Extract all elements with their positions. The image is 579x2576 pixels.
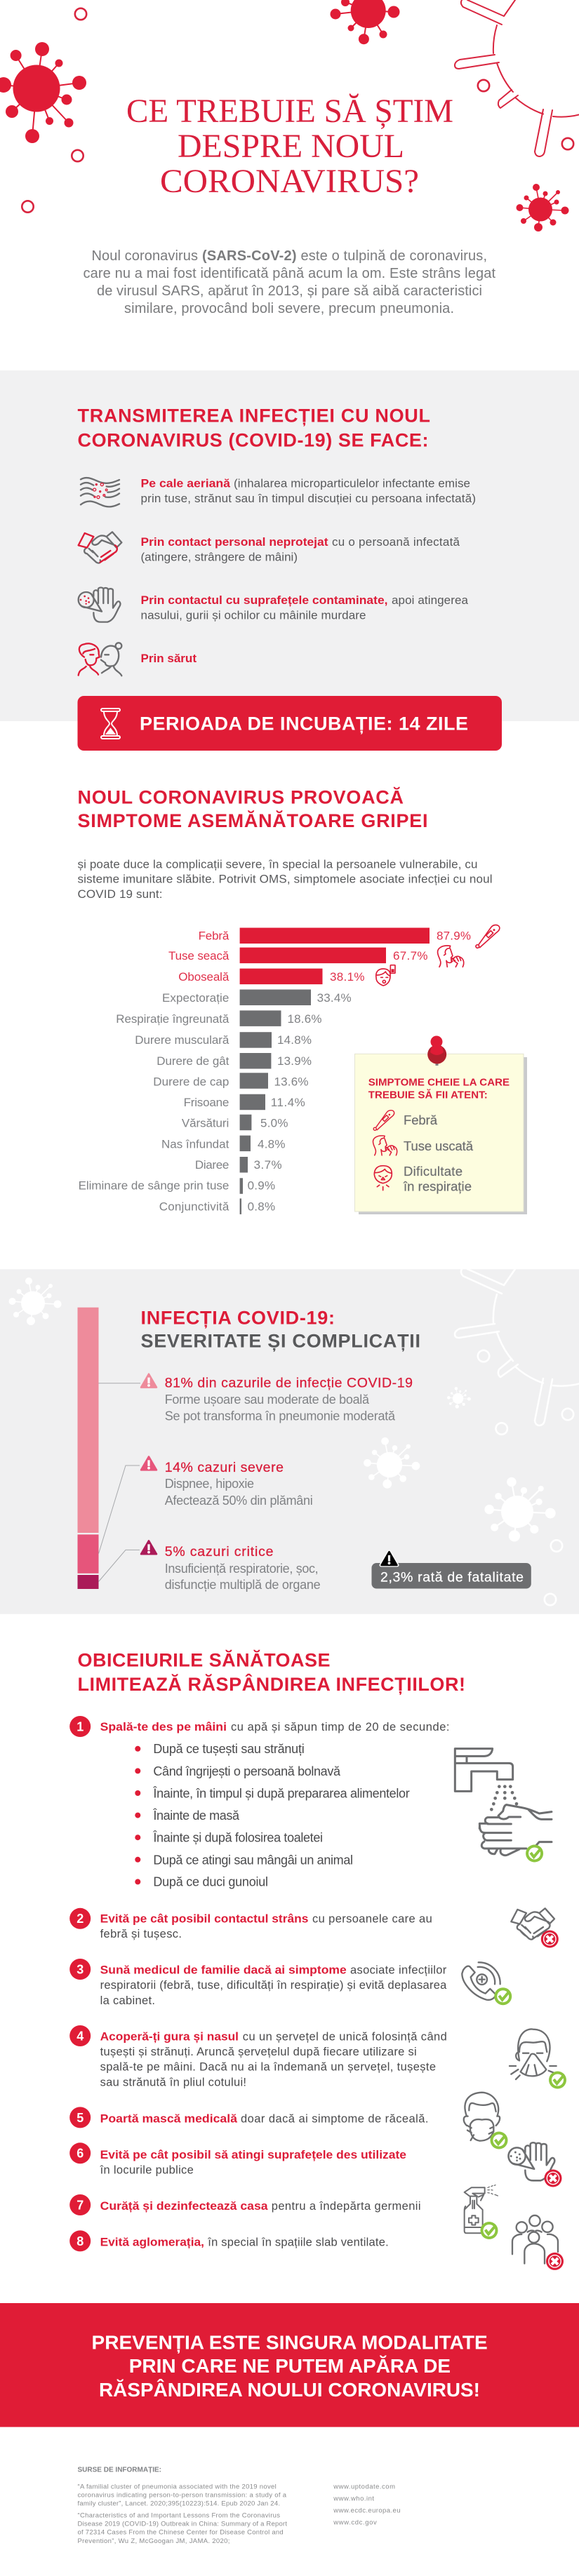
sources: websites: www.cdc.gov — [333, 2519, 377, 2527]
text: airborne — [140, 477, 476, 505]
stacked severity bar — [77, 1308, 98, 1589]
habit 3: call doctor: asociate infecțiilor — [350, 1964, 447, 1977]
icon: kiss — [79, 643, 121, 676]
habit 7: disinfect — [69, 2194, 420, 2215]
item: 14% — [141, 1456, 313, 1508]
icon: hand with germ — [508, 2142, 554, 2180]
bar: Oboseală: 38.1% — [330, 970, 365, 984]
bar: Febră: 87.9% — [437, 929, 471, 943]
habit 4: cover mouth: tușești și strănuți. Aruncă șervețelul după fiecare utilizare si — [100, 2046, 417, 2058]
habit 3: call doctor: 3 — [76, 1963, 84, 1977]
virus decoration: large solid left — [0, 42, 86, 143]
text: symptoms intro: COVID 19 sunt: — [77, 887, 163, 901]
bar: Nas înfundat: 4.8% — [258, 1138, 285, 1151]
text: symptoms intro: și poate duce la complicații severe, în special la persoanele vulnerabile, cu — [77, 857, 477, 871]
banner: incubation — [77, 696, 502, 751]
icon: tired face with low battery — [376, 965, 395, 986]
text: surfaces: Prin contactul cu suprafețele contaminate, — [140, 594, 387, 607]
habit 8: avoid crowds: 8 — [76, 2234, 84, 2248]
text: personal contact: Prin contact personal neprotejat — [140, 536, 328, 549]
item: 81% — [141, 1374, 413, 1423]
habit 6: avoid touching surfaces: 6 — [76, 2147, 84, 2161]
sticky note: key symptoms — [355, 1035, 527, 1214]
label: breathing difficulty — [403, 1164, 472, 1194]
habit 1: wash hands: cu apă și săpun timp de 20 de secunde: — [231, 1721, 449, 1733]
badge: cross — [546, 2253, 564, 2270]
virus decoration: top centre — [330, 0, 400, 44]
habit 2: avoid contact: 2 — [76, 1912, 84, 1926]
habit 3: call doctor: respiratorii (febră, tuse, dificultăți în respirație) și evită deplasarea — [100, 1979, 447, 1992]
habit 7: disinfect: 7 — [76, 2199, 84, 2213]
heading: healthy habits: LIMITEAZĂ RĂSPÂNDIREA INFECȚIILOR! — [77, 1673, 465, 1695]
text: surfaces — [140, 593, 469, 622]
icon: hand with germ — [79, 587, 120, 622]
habit 1: wash hands: Spală-te des pe mâini — [100, 1721, 227, 1733]
sources: references: Disease 2019 (COVID-19) Outbreak in China: Summary of a Report — [77, 2521, 287, 2528]
bullet list: Înainte, în timpul și după prepararea alimentelor — [152, 1786, 410, 1800]
intro text: de virusul SARS, apărut în 2013, și pare să aibă caracteristici — [97, 283, 482, 299]
bar: Oboseală — [178, 969, 365, 984]
habit 2: avoid contact: febră și tușesc. — [100, 1928, 182, 1940]
badge: cross — [541, 1931, 559, 1947]
text: symptoms intro — [77, 857, 493, 901]
banner text: PERIOADA DE INCUBAȚIE: 14 ZILE — [140, 713, 468, 734]
habit 2: avoid contact: Evită pe cât posibil contactul strâns — [100, 1912, 309, 1925]
heading: transmission — [77, 405, 430, 450]
title: DESPRE NOUL — [178, 128, 404, 165]
habit 6: avoid touching surfaces: în locurile publice — [100, 2164, 194, 2177]
virus decoration: outline top right — [455, 0, 579, 156]
bullet list: Când îngrijești o persoană bolnavă — [153, 1764, 341, 1778]
text: airborne: Pe cale aeriană — [140, 477, 231, 490]
heading: symptoms — [77, 786, 428, 831]
text: personal contact — [140, 535, 460, 564]
intro text: este o tulpină de coronavirus, — [300, 248, 487, 264]
badge: check — [549, 2071, 566, 2089]
bar: Eliminare de sânge prin tuse: Eliminare de sânge prin tuse — [79, 1179, 229, 1193]
bar: Nas înfundat — [161, 1136, 285, 1151]
habit 3: call doctor: Sună medicul de familie dacă ai simptome — [100, 1964, 347, 1977]
item: 5%: disfuncție multiplă de organe — [165, 1578, 321, 1592]
icon: handshake — [79, 532, 121, 563]
icon: crowd — [512, 2215, 558, 2264]
habit 5: wear mask: Poartă mască medicală — [100, 2112, 238, 2125]
bar: Vărsături: 5.0% — [260, 1117, 288, 1129]
habit 7: disinfect: Curăță și dezinfectează casa — [100, 2200, 268, 2213]
bar: Oboseală: Oboseală — [178, 970, 229, 984]
habit 8: avoid crowds: în special în spațiile slab ventilate. — [207, 2236, 389, 2248]
text: personal contact: cu o persoană infectată — [332, 535, 460, 549]
bar: Durere de gât: 13.9% — [277, 1054, 312, 1068]
title — [126, 93, 453, 200]
bar: Expectorație: 33.4% — [317, 991, 352, 1005]
icon: spray bottle — [465, 2185, 498, 2233]
heading: transmission: TRANSMITEREA INFECȚIEI CU NOUL — [77, 405, 430, 427]
heading: symptoms: SIMPTOME ASEMĂNĂTOARE GRIPEI — [77, 810, 428, 831]
closing banner: RĂSPÂNDIREA NOULUI CORONAVIRUS! — [99, 2379, 480, 2401]
heading: healthy habits — [77, 1649, 465, 1695]
item: 14%: Dispnee, hipoxie — [165, 1477, 254, 1491]
habit 8: avoid crowds: Evită aglomerația, — [100, 2236, 204, 2248]
heading: transmission: CORONAVIRUS (COVID-19) SE FACE: — [77, 429, 428, 450]
habit 3: call doctor: la cabinet. — [100, 1994, 155, 2007]
bar: Expectorație: Expectorație — [162, 991, 229, 1005]
text: airborne: (inhalarea microparticulelor infectante emise — [234, 477, 470, 490]
text: personal contact: (atingere, strângere de mâini) — [140, 550, 298, 564]
bar: Diaree — [195, 1157, 282, 1173]
label: breathing difficulty: în respirație — [403, 1179, 472, 1194]
text: surfaces: nasului, gurii și ochilor cu mâinile murdare — [140, 609, 366, 622]
icon: hourglass — [101, 709, 120, 739]
bullet list: Înainte și după folosirea toaletei — [152, 1831, 323, 1845]
badge: check — [526, 1845, 543, 1862]
icon: handshake forbidden — [511, 1908, 554, 1940]
sources: websites: www.ecdc.europa.eu — [333, 2507, 400, 2514]
item: 14%: 14% cazuri severe — [165, 1460, 284, 1475]
bar: Durere de cap: 13.6% — [274, 1075, 309, 1089]
habit 8: avoid crowds — [69, 2230, 389, 2251]
bar: Durere de cap — [153, 1073, 309, 1089]
panel: severity — [0, 1269, 579, 1614]
habit 1: wash hands: 1 — [76, 1720, 84, 1734]
habit 6: avoid touching surfaces — [69, 2142, 406, 2177]
icon: cough — [373, 1136, 397, 1155]
intro text: similare, provocând boli severe, precum pneumonia. — [124, 301, 454, 316]
text: airborne: prin tuse, strănut sau în timpul discuției cu persoana infectată) — [140, 492, 476, 505]
badge: cross — [545, 2169, 561, 2187]
bar: Vărsături — [182, 1115, 288, 1130]
bar: Tuse seacă — [168, 948, 428, 963]
habit 4: cover mouth: Acoperă-ți gura și nasul — [100, 2030, 239, 2043]
bullet list: După ce tușești sau strănuți — [153, 1742, 305, 1756]
sources: references: of 72314 Cases From the Chinese Center for Disease Control and — [77, 2529, 284, 2537]
bar: Conjunctivită: Conjunctivită — [159, 1200, 229, 1214]
bar chart: symptoms — [79, 927, 471, 1214]
bar: Respirație îngreunată: 18.6% — [288, 1012, 321, 1026]
intro text: Noul coronavirus — [91, 248, 198, 264]
sources: references: family cluster”, Lancet. 2020;395(10223):514. Epub 2020 Jan 24. — [77, 2500, 280, 2508]
decorative rings — [22, 8, 573, 213]
item: 14%: Afectează 50% din plămâni — [165, 1494, 313, 1508]
sources: references: coronavirus indicating person-to-person transmission: a study of a — [77, 2492, 287, 2499]
item: 81%: 81% din cazurile de infecție COVID-19 — [165, 1376, 413, 1391]
habit 6: avoid touching surfaces: Evită pe cât posibil să atingi suprafețele des utilizate — [100, 2149, 406, 2161]
bullet list — [135, 1742, 410, 1889]
item: 81%: Forme ușoare sau moderate de boală — [165, 1393, 370, 1407]
habit 4: cover mouth: cu un șervețel de unică folosință când — [243, 2030, 447, 2043]
intro text: (SARS-CoV-2) — [202, 248, 296, 264]
item: 81%: Se pot transforma în pneumonie moderată — [165, 1409, 396, 1423]
bar: Tuse seacă: 67.7% — [393, 949, 428, 962]
badge: check — [480, 2222, 498, 2239]
habit 2: avoid contact — [69, 1908, 432, 1940]
sources: references: “A familial cluster of pneumonia associated with the 2019 novel — [77, 2483, 277, 2490]
panel: transmission — [0, 370, 579, 721]
bar: Durere de cap: Durere de cap — [153, 1075, 229, 1089]
bar: Frisoane: 11.4% — [271, 1096, 305, 1109]
fatality callout — [372, 1552, 531, 1588]
intro text: care nu a mai fost identificată până acum la om. Este strâns legat — [83, 266, 495, 281]
habit 3: call doctor — [69, 1959, 447, 2007]
bar: Vărsături: Vărsături — [182, 1117, 229, 1129]
habit 4: cover mouth: 4 — [76, 2029, 84, 2043]
icon: phone — [462, 1962, 500, 2000]
habit 5: wear mask: doar dacă ai simptome de răceală. — [241, 2112, 428, 2125]
text: symptoms intro: sisteme imunitare slăbite. Potrivit OMS, simptomele asociate infecției cu noul — [77, 873, 493, 886]
pin — [427, 1035, 446, 1066]
sources: references — [77, 2483, 287, 2545]
title: CE TREBUIE SĂ ȘTIM — [126, 93, 453, 130]
note heading: SIMPTOME CHEIE LA CARE — [368, 1076, 510, 1089]
habit 5: wear mask — [69, 2107, 428, 2128]
sources: websites — [333, 2483, 400, 2527]
note heading — [368, 1076, 510, 1101]
bar: Conjunctivită: 0.8% — [248, 1200, 275, 1214]
habit 5: wear mask: 5 — [76, 2111, 84, 2125]
bar: Durere de gât: Durere de gât — [157, 1054, 229, 1068]
bullet list: Înainte de masă — [152, 1809, 240, 1823]
text: surfaces: apoi atingerea — [392, 593, 469, 607]
bar: Respirație îngreunată — [116, 1010, 322, 1026]
icon: sneezing into tissue — [510, 2029, 557, 2079]
sources: websites: www.who.int — [333, 2495, 374, 2503]
icon: breathing difficulty — [374, 1166, 392, 1190]
bar: Frisoane — [184, 1094, 305, 1110]
fatality callout: 2,3% rată de fatalitate — [380, 1570, 524, 1585]
title: CORONAVIRUS? — [160, 163, 419, 200]
bar: Diaree: 3.7% — [254, 1158, 282, 1172]
icon: tap and washing hands — [455, 1749, 552, 1856]
sources heading: SURSE DE INFORMAȚIE: — [77, 2467, 161, 2474]
badge: check — [494, 1987, 512, 2005]
closing banner: PRIN CARE NE PUTEM APĂRA DE — [129, 2355, 451, 2377]
text: kiss: Prin sărut — [140, 652, 197, 665]
bar: Durere musculară: 14.8% — [277, 1033, 312, 1047]
note heading: TREBUIE SĂ FII ATENT: — [368, 1089, 488, 1101]
bullet list: După ce duci gunoiul — [153, 1874, 268, 1889]
bar: Expectorație — [162, 989, 352, 1005]
label: breathing difficulty: Dificultate — [404, 1164, 462, 1179]
habit 7: disinfect: pentru a îndepărta germenii — [272, 2200, 421, 2213]
heading: severity: INFECȚIA COVID-19: — [140, 1308, 335, 1329]
heading: symptoms: NOUL CORONAVIRUS PROVOACĂ — [77, 786, 404, 808]
habit 2: avoid contact: cu persoanele care au — [312, 1912, 432, 1925]
item: 5%: Insuficiență respiratorie, șoc, — [165, 1562, 319, 1576]
sources: references: Prevention”, Wu Z, McGoogan JM, JAMA. 2020; — [77, 2537, 229, 2545]
bar: Eliminare de sânge prin tuse — [79, 1178, 275, 1194]
bar: Conjunctivită — [159, 1198, 275, 1214]
habit 4: cover mouth: spală-te pe mâini. Dacă nu ai la îndemană un șervețel, tușește — [100, 2061, 436, 2074]
bar: Febră: Febră — [199, 929, 229, 943]
bar: Frisoane: Frisoane — [184, 1096, 229, 1109]
bar: Durere de gât — [157, 1053, 312, 1069]
bar: Diaree: Diaree — [195, 1158, 229, 1172]
item: 5%: 5% cazuri critice — [165, 1544, 274, 1559]
icon: thermometer — [373, 1111, 394, 1130]
habit 1: wash hands — [69, 1716, 449, 1889]
icon: thermometer — [476, 925, 500, 948]
intro text — [83, 248, 495, 316]
bar: Respirație îngreunată: Respirație îngreunată — [116, 1012, 229, 1026]
virus decoration: small right — [517, 184, 568, 232]
bar: Tuse seacă: Tuse seacă — [168, 949, 229, 962]
heading: healthy habits: OBICEIURILE SĂNĂTOASE — [77, 1649, 330, 1671]
heading: severity — [140, 1308, 420, 1351]
connectors — [98, 1383, 140, 1581]
background viruses — [8, 1269, 579, 1605]
heading: severity: SEVERITATE ȘI COMPLICAȚII — [140, 1330, 420, 1351]
bar: Eliminare de sânge prin tuse: 0.9% — [248, 1179, 275, 1193]
bar: Durere musculară — [135, 1032, 312, 1048]
habit 4: cover mouth — [69, 2025, 447, 2089]
item: 5% — [141, 1541, 321, 1592]
bar: Febră — [199, 927, 471, 944]
closing banner — [0, 2303, 579, 2427]
label: Febră: Febră — [404, 1113, 438, 1127]
icon: face mask — [464, 2093, 500, 2141]
icon: airborne particles — [81, 478, 119, 507]
sources: websites: www.uptodate.com — [333, 2483, 395, 2490]
sources: references: “Characteristics of and Important Lessons From the Coronavirus — [77, 2511, 280, 2520]
bullet list: După ce atingi sau mângâi un animal — [153, 1853, 353, 1867]
bar: Durere musculară: Durere musculară — [135, 1033, 229, 1047]
icon: coughing face — [438, 946, 464, 967]
habit 4: cover mouth: sau strănută în pliul cotului! — [100, 2077, 246, 2089]
bar: Nas înfundat: Nas înfundat — [161, 1138, 229, 1151]
badge: check — [490, 2131, 508, 2149]
closing banner: PREVENȚIA ESTE SINGURA MODALITATE — [91, 2332, 488, 2353]
label: Tuse uscată: Tuse uscată — [404, 1139, 474, 1153]
